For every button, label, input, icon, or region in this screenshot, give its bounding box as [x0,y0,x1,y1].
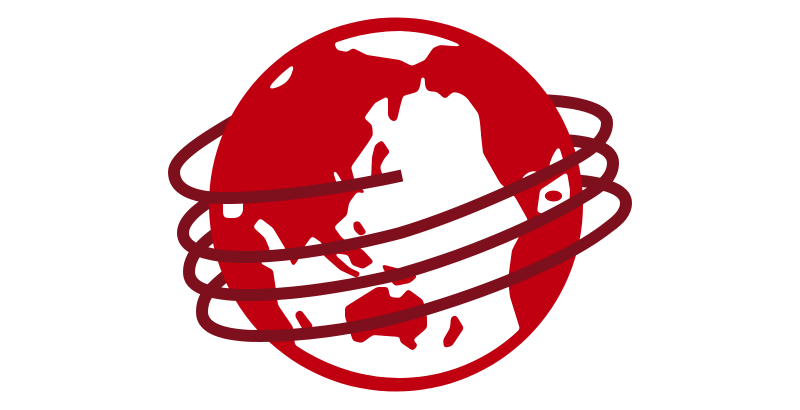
white oceans and seas [223,31,570,378]
new zealand [443,315,464,348]
front segments of orbit rings [174,123,626,336]
ring three [189,163,613,295]
ring one [174,172,402,198]
australia [345,287,427,351]
arctic lake [268,64,294,89]
island: cuba [544,190,562,202]
main ocean [253,77,528,378]
arctic ocean [334,31,465,66]
atlantic blob [522,171,542,192]
ring four [202,203,626,336]
island: philippines [353,221,367,236]
sea notch [333,170,343,184]
globe disc [209,18,583,392]
island: indonesia [381,264,418,286]
atlantic [537,172,570,216]
peninsula [371,140,390,180]
globe [209,18,583,392]
madagascar [295,310,314,330]
red landmasses and islands [295,140,562,351]
ring two [183,123,607,257]
west africa bay [223,192,243,218]
caribbean lens [549,146,565,173]
back segments of orbit rings [174,100,626,312]
